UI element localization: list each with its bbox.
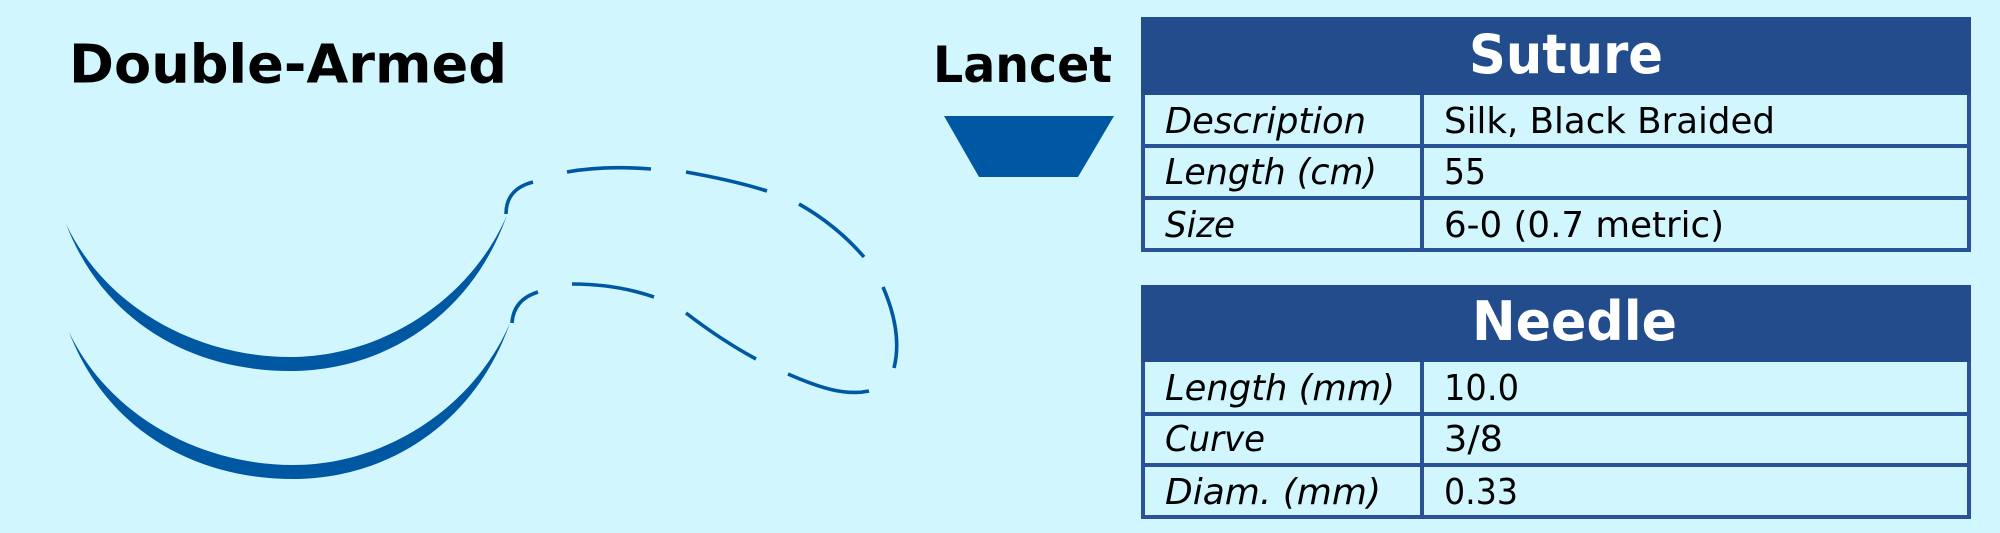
row: size bbox=[1165, 205, 1724, 246]
needle table header bbox=[1141, 285, 1971, 362]
icon: lancet needle cross-section bbox=[944, 116, 1114, 177]
suture table header bbox=[1141, 17, 1971, 95]
upper curved needle bbox=[66, 215, 507, 371]
row: diameter bbox=[1165, 472, 1518, 513]
needle table grid bbox=[1141, 362, 1971, 517]
suture table header: Suture bbox=[1469, 23, 1663, 86]
row: needle length bbox=[1165, 368, 1519, 409]
row: length: 55 bbox=[1444, 152, 1486, 193]
heading: Lancet: Lancet bbox=[933, 36, 1112, 94]
row: diameter: Diam. (mm) bbox=[1165, 472, 1381, 513]
row: curve: 3/8 bbox=[1444, 419, 1503, 460]
needle table header: Needle bbox=[1472, 290, 1677, 353]
row: curve: Curve bbox=[1165, 419, 1265, 460]
illustration: double-armed suture bbox=[66, 168, 897, 479]
row: description: Silk, Black Braided bbox=[1444, 101, 1775, 142]
row: diameter: 0.33 bbox=[1444, 472, 1518, 513]
row: needle length: 10.0 bbox=[1444, 368, 1519, 409]
row: description bbox=[1165, 101, 1775, 142]
lower curved needle bbox=[69, 323, 510, 479]
suture table grid bbox=[1141, 95, 1971, 250]
table: needle bbox=[1141, 285, 1971, 517]
row: needle length: Length (mm) bbox=[1165, 368, 1395, 409]
row: curve bbox=[1165, 419, 1503, 460]
table: suture bbox=[1141, 17, 1971, 250]
row: description: Description bbox=[1165, 101, 1366, 142]
dashed suture thread bbox=[506, 168, 897, 392]
heading: Double-Armed: Double-Armed bbox=[69, 32, 507, 96]
row: size: Size bbox=[1165, 205, 1235, 246]
row: length: Length (cm) bbox=[1165, 152, 1377, 193]
row: length bbox=[1165, 152, 1486, 193]
row: size: 6-0 (0.7 metric) bbox=[1444, 205, 1724, 246]
